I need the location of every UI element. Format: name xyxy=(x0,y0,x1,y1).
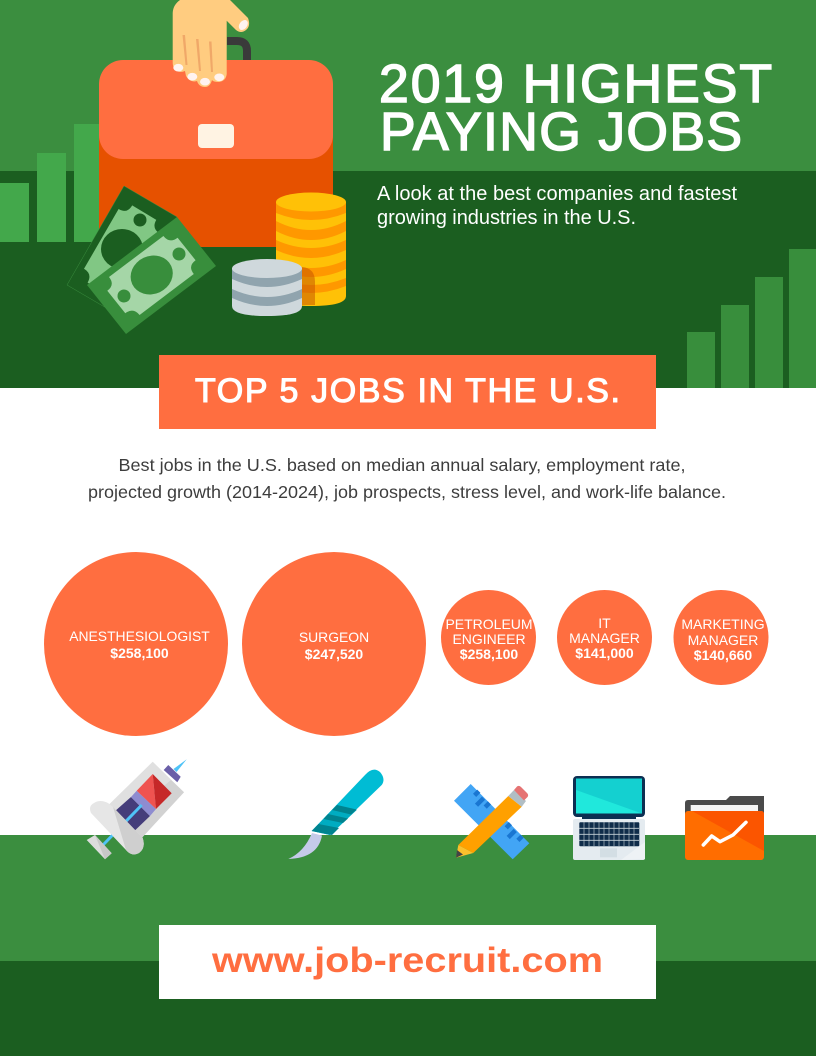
bubble: marketing manager: $140,660 xyxy=(694,647,752,663)
title: 2019 HIGHEST xyxy=(379,55,772,114)
icon: scalpel xyxy=(288,770,383,859)
title: PAYING JOBS xyxy=(380,103,742,162)
subtitle xyxy=(377,183,737,229)
bubble: anesthesiologist: ANESTHESIOLOGIST xyxy=(69,628,210,644)
icon: syringe xyxy=(87,759,187,859)
bubble: surgeon: SURGEON xyxy=(299,629,369,645)
banner: website: www.job-recruit.com xyxy=(211,940,603,980)
bubble: marketing manager: MARKETING xyxy=(681,616,765,632)
bubble: marketing manager xyxy=(674,590,768,685)
bubble: it manager: IT xyxy=(598,615,611,631)
banner: top 5 jobs: TOP 5 JOBS IN THE U.S. xyxy=(195,372,620,410)
icon: briefcase xyxy=(99,41,333,247)
description text xyxy=(88,455,726,502)
icon: ruler xyxy=(454,784,529,859)
banner: top 5 jobs xyxy=(159,355,656,429)
title xyxy=(379,55,772,162)
icon: laptop xyxy=(573,776,645,860)
bubble: petroleum engineer: $258,100 xyxy=(460,646,518,662)
icon: silver coins xyxy=(232,259,302,316)
bubble: anesthesiologist: $258,100 xyxy=(110,645,169,661)
icon: banknotes xyxy=(67,186,216,334)
bubble: it manager: $141,000 xyxy=(575,645,634,661)
bubble: petroleum engineer: ENGINEER xyxy=(452,631,526,647)
bubble: petroleum engineer xyxy=(441,590,536,685)
bubble: it manager xyxy=(557,590,652,685)
subtitle: A look at the best companies and fastest xyxy=(377,183,737,205)
icon: pencil xyxy=(456,786,528,858)
bubble: it manager: MANAGER xyxy=(569,630,640,646)
bar chart: left decoration xyxy=(0,124,100,242)
bubble: petroleum engineer: PETROLEUM xyxy=(445,616,533,632)
icon: gold coins xyxy=(276,192,346,306)
subtitle: growing industries in the U.S. xyxy=(377,207,636,229)
description text: projected growth (2014-2024), job prospects, stress level, and work-life balance. xyxy=(88,482,726,502)
bubble: anesthesiologist xyxy=(44,552,228,736)
bar chart: right decoration xyxy=(687,249,816,388)
icon: hand xyxy=(173,0,250,87)
bubble: surgeon xyxy=(242,552,426,736)
bubble: surgeon: $247,520 xyxy=(305,646,363,662)
banner: website xyxy=(159,925,656,999)
description text: Best jobs in the U.S. based on median annual salary, employment rate, xyxy=(118,455,686,475)
icon: folder xyxy=(685,796,764,860)
bubble: marketing manager: MANAGER xyxy=(688,632,758,648)
